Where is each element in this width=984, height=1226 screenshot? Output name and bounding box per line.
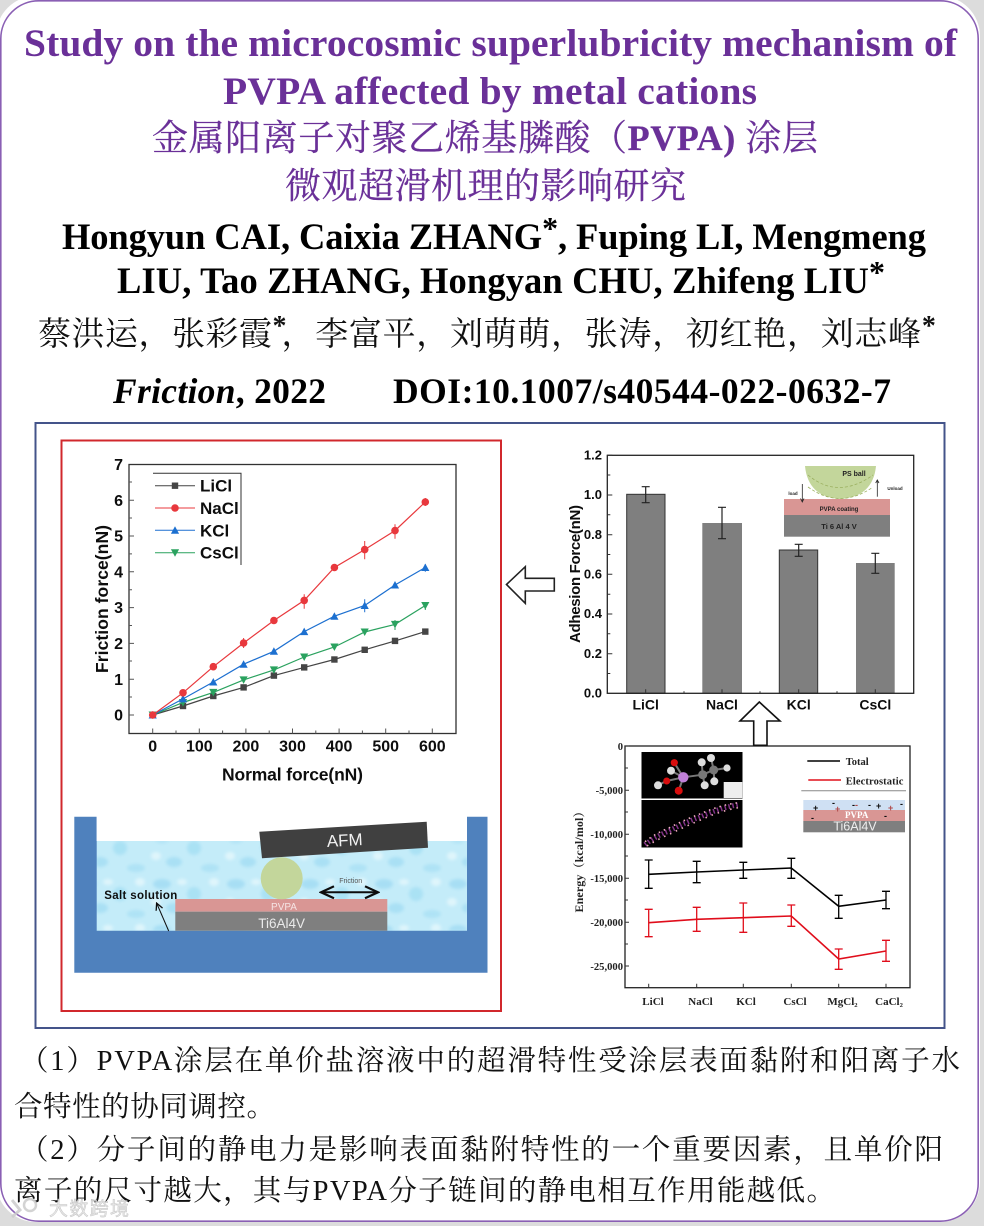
inset: PS ball on PVPA coating: PS ball <box>842 471 866 478</box>
bar chart: adhesion force: CsCl <box>859 696 891 712</box>
authors: Chinese: * <box>272 311 287 342</box>
legend: energy series: Electrostatic <box>846 776 904 788</box>
citation and DOI <box>112 371 891 411</box>
line chart: friction force vs normal force: 600 <box>419 739 446 756</box>
line chart: interaction energy <box>572 742 910 1008</box>
line chart: friction force vs normal force: 300 <box>279 739 306 756</box>
diagram: AFM in salt solution <box>74 800 488 973</box>
inset: PS ball on PVPA coating <box>784 466 903 537</box>
panel: figure frame <box>36 423 944 1028</box>
citation and DOI: DOI:10.1007/s40544-022-0632-7 <box>393 371 891 411</box>
inset: charged PVPA coating: - <box>855 800 858 810</box>
line chart: interaction energy: NaCl <box>688 996 713 1008</box>
bar chart: adhesion force: 0.0 <box>584 686 602 700</box>
line chart: friction force vs normal force: 3 <box>114 600 123 617</box>
text block: conclusions: 离子的尺寸越大，其与PVPA分子链间的静电相互作用能越低。 <box>14 1175 835 1207</box>
diagram: AFM in salt solution: AFM <box>326 830 363 851</box>
diagram: AFM in salt solution: Friction <box>339 878 362 885</box>
bar chart: adhesion force: 0.8 <box>584 527 602 542</box>
legend: energy series: Total <box>846 757 869 768</box>
title: English: Study on the microcosmic superlubricity mechanism of <box>24 21 958 65</box>
bar chart: adhesion force: NaCl <box>706 696 738 712</box>
inset: charged PVPA coating: + <box>888 803 893 813</box>
title: Chinese <box>152 118 818 206</box>
authors: English: , Fuping LI, Mengmeng <box>558 216 926 257</box>
bar chart: adhesion force: 0.2 <box>584 646 602 661</box>
line chart: friction force vs normal force: 7 <box>114 457 123 474</box>
bar chart: adhesion force: 0.4 <box>584 606 603 621</box>
inset: charged PVPA coating: Ti6Al4V <box>833 820 877 834</box>
panel: friction measurements <box>62 440 501 1011</box>
inset: charged PVPA coating: - <box>852 800 855 810</box>
bar chart: adhesion force <box>567 448 914 712</box>
diagram: AFM in salt solution: PVPA <box>271 902 297 913</box>
watermark: 大数跨境 <box>49 1198 129 1220</box>
authors: English: * <box>542 210 558 246</box>
line chart: interaction energy: 0 <box>618 742 623 753</box>
authors: English: * <box>869 254 885 290</box>
bar chart: adhesion force: Adhesion Force(nN) <box>567 505 584 643</box>
line chart: friction force vs normal force: 0 <box>114 708 123 725</box>
line chart: interaction energy: -25,000 <box>590 962 623 973</box>
authors: Chinese: ，李富平，刘萌萌，张涛，初红艳，刘志峰 <box>282 316 922 353</box>
inset: PS ball on PVPA coating: Ti 6 Al 4 V <box>821 522 857 531</box>
line chart: friction force vs normal force: 200 <box>233 739 259 756</box>
citation and DOI: Friction, 2022 <box>112 371 326 411</box>
inset: charged PVPA coating: - <box>868 800 871 810</box>
line chart: friction force vs normal force: 1 <box>114 672 123 689</box>
legend: salts: KCl <box>200 521 229 540</box>
legend: salts: LiCl <box>200 477 232 496</box>
inset: PS ball on PVPA coating: PVPA coating <box>820 507 859 513</box>
line chart: friction force vs normal force: 400 <box>326 739 353 756</box>
line chart: interaction energy: -10,000 <box>590 830 623 841</box>
line chart: interaction energy: Energy（kcal/mol） <box>572 806 586 912</box>
authors: Chinese <box>38 311 936 353</box>
line chart: friction force vs normal force: 0 <box>148 739 157 756</box>
inset: charged PVPA coating: - <box>900 799 903 809</box>
line chart: interaction energy: CsCl <box>783 996 807 1008</box>
inset: charged PVPA coating: - <box>811 813 814 823</box>
text block: conclusions: （1）PVPA涂层在单价盐溶液中的超滑特性受涂层表面黏附和阳离子水 <box>20 1045 960 1077</box>
line chart: interaction energy: -5,000 <box>596 786 623 797</box>
text block: conclusions <box>14 1045 960 1207</box>
inset: charged PVPA coating: PVPA <box>845 810 869 820</box>
title: English: PVPA affected by metal cations <box>223 69 757 113</box>
authors: English: LIU, Tao ZHANG, Hongyan CHU, Zhifeng LIU <box>117 260 869 301</box>
authors: Chinese: 蔡洪运，张彩霞 <box>38 317 272 353</box>
line chart: friction force vs normal force: Friction force(nN) <box>92 525 112 673</box>
authors: Chinese: * <box>922 311 936 342</box>
title: Chinese: 金属阳离子对聚乙烯基膦酸（PVPA) 涂层 <box>152 118 818 158</box>
line chart: interaction energy: CaCl₂ <box>875 996 904 1008</box>
line chart: friction force vs normal force: Normal force(nN) <box>222 765 363 785</box>
line chart: interaction energy: KCl <box>736 996 756 1008</box>
arrow: adhesion to friction <box>506 567 554 603</box>
bar chart: adhesion force: 1.0 <box>584 487 602 502</box>
inset: charged PVPA coating: + <box>876 801 881 811</box>
inset: charged PVPA coating: + <box>813 803 818 813</box>
legend: salts <box>153 473 241 565</box>
inset: PS ball on PVPA coating: Unload <box>887 486 903 491</box>
text block: conclusions: 合特性的协同调控。 <box>14 1091 275 1123</box>
inset: charged PVPA coating <box>803 798 905 834</box>
watermark <box>12 1198 129 1220</box>
diagram: AFM in salt solution: Salt solution <box>104 890 177 902</box>
inset: molecule model <box>642 752 742 798</box>
bar chart: adhesion force: 0.6 <box>584 566 602 582</box>
line chart: friction force vs normal force: 100 <box>186 739 213 756</box>
line chart: friction force vs normal force: 500 <box>372 739 399 756</box>
title: English <box>24 21 958 113</box>
authors: English <box>62 210 926 301</box>
line chart: friction force vs normal force <box>92 457 456 785</box>
line chart: friction force vs normal force: 6 <box>114 493 123 510</box>
inset: charged PVPA coating: + <box>835 804 840 814</box>
bar chart: adhesion force: 1.2 <box>584 448 602 462</box>
line chart: friction force vs normal force: 2 <box>114 636 123 653</box>
inset: charged PVPA coating: - <box>884 811 887 821</box>
legend: salts: NaCl <box>200 499 239 518</box>
legend: salts: CsCl <box>200 544 239 563</box>
line chart: interaction energy: MgCl₂ <box>827 996 858 1008</box>
legend: energy series <box>801 757 906 791</box>
diagram: AFM in salt solution: Ti6Al4V <box>258 916 305 931</box>
line chart: interaction energy: LiCl <box>642 996 664 1008</box>
line chart: interaction energy: -20,000 <box>590 918 623 929</box>
inset: polymer chain <box>642 800 742 848</box>
authors: English: Hongyun CAI, Caixia ZHANG <box>62 216 542 257</box>
line chart: interaction energy: -15,000 <box>590 874 623 885</box>
title: Chinese: 微观超滑机理的影响研究 <box>285 166 686 206</box>
arrow: energy to adhesion <box>740 702 780 745</box>
inset: PS ball on PVPA coating: load <box>788 491 798 496</box>
bar chart: adhesion force: LiCl <box>632 696 659 712</box>
inset: charged PVPA coating: - <box>832 798 835 808</box>
bar chart: adhesion force: KCl <box>787 696 811 712</box>
line chart: friction force vs normal force: 5 <box>114 529 123 546</box>
line chart: friction force vs normal force: 4 <box>114 564 123 581</box>
text block: conclusions: （2）分子间的静电力是影响表面黏附特性的一个重要因素，且单价阳 <box>20 1134 943 1166</box>
